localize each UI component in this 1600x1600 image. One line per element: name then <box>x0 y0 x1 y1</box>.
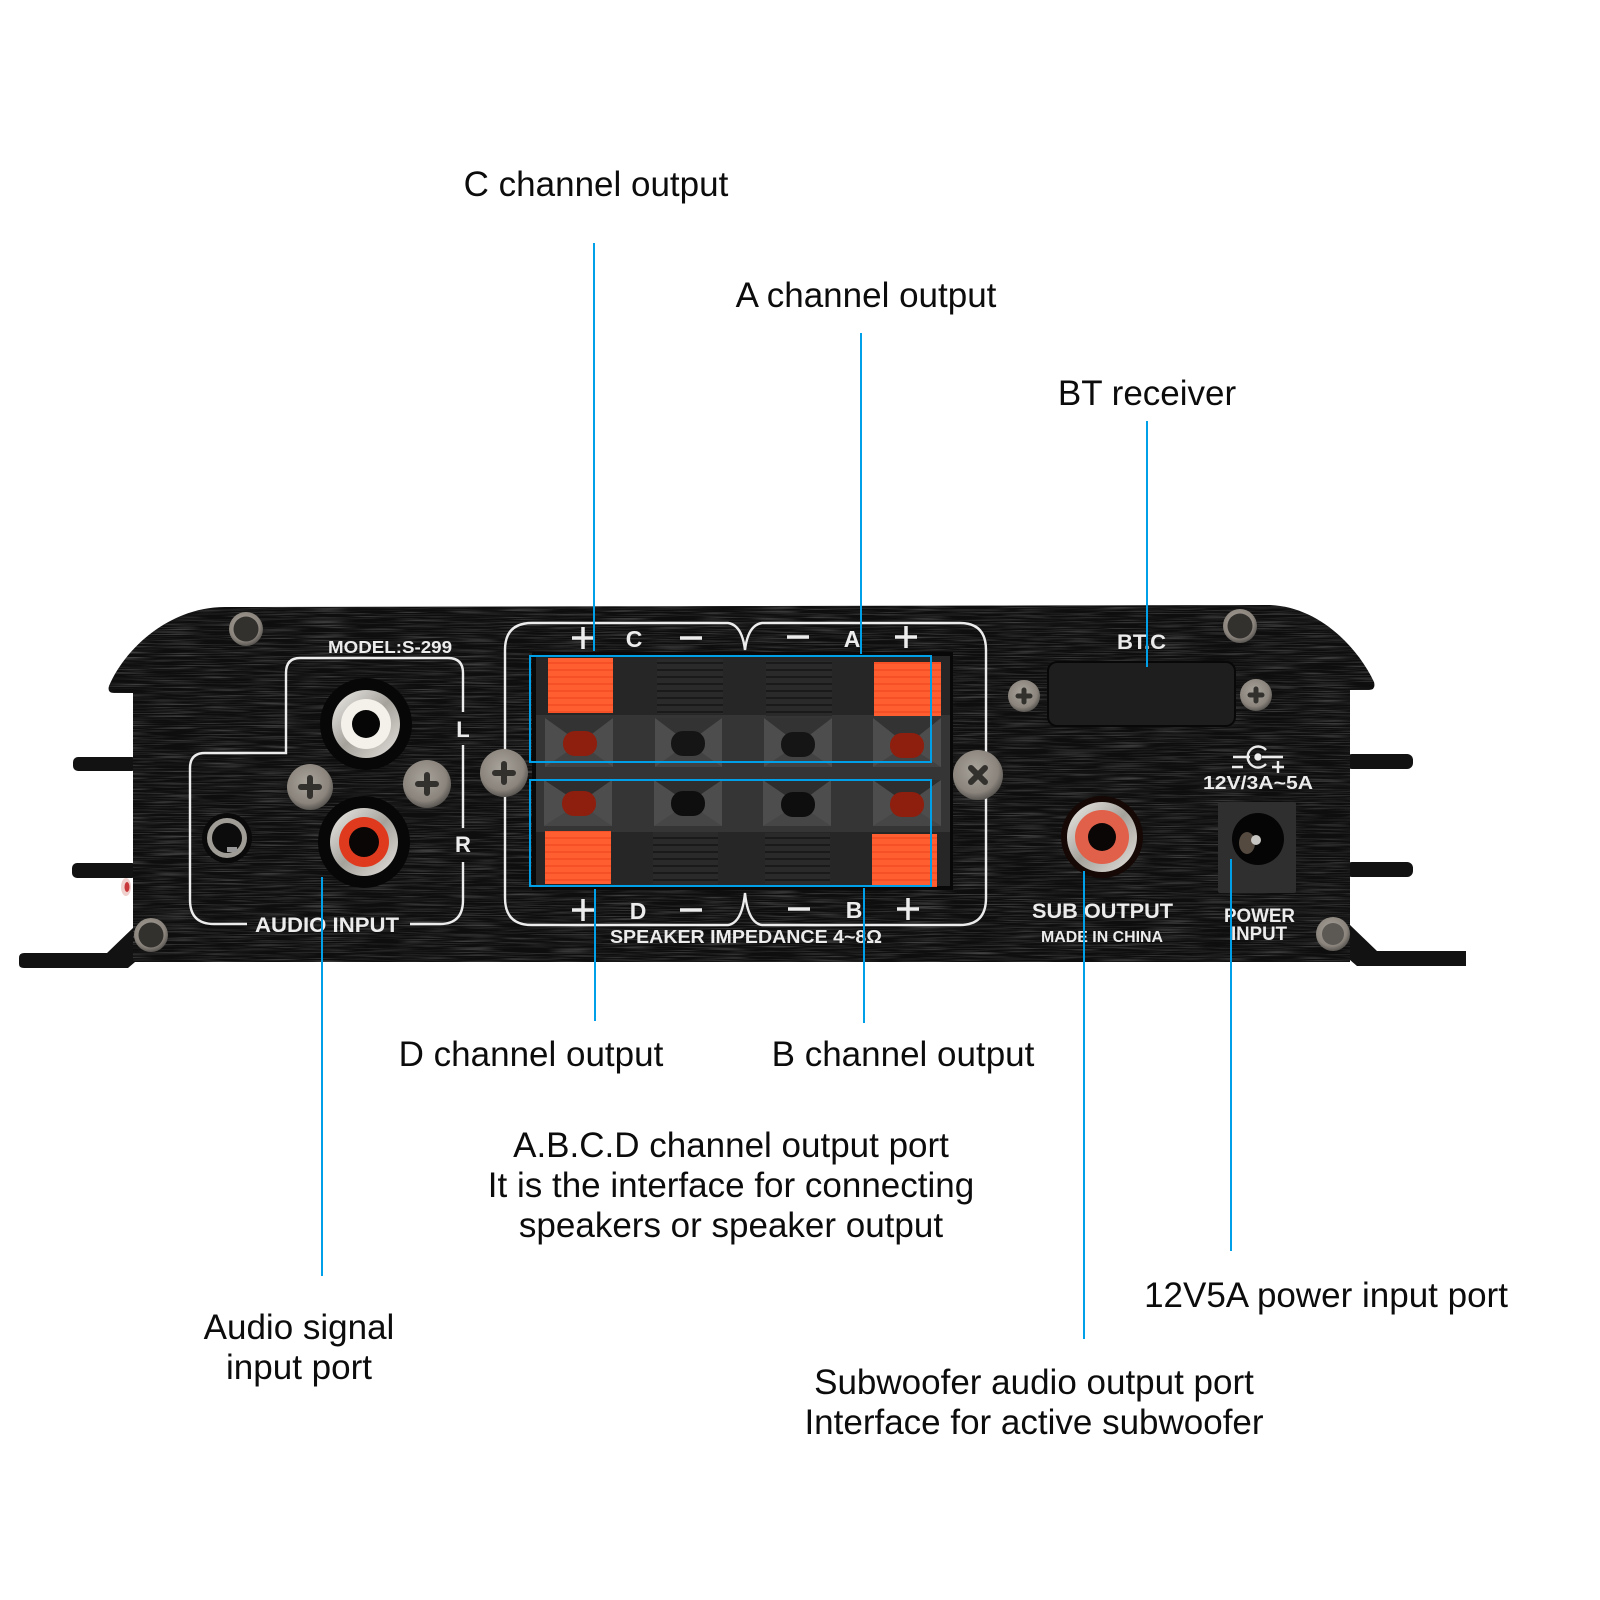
text block: subwoofer output description: Subwoofer audio output port <box>814 1363 1254 1402</box>
audio input outline <box>190 658 463 924</box>
left channel label: L <box>456 717 470 742</box>
text block: audio signal input port: input port <box>226 1348 372 1387</box>
BT label: BT.C <box>1117 631 1166 654</box>
speaker impedance label: SPEAKER IMPEDANCE 4~8Ω <box>610 926 882 947</box>
sub output label: SUB OUTPUT <box>1032 900 1173 923</box>
leader line: audio input <box>321 877 323 1276</box>
top polarity labels: C <box>626 626 642 652</box>
BT left screw <box>1008 680 1040 712</box>
label: C channel output: C channel output <box>464 165 729 204</box>
socket A minus <box>764 718 832 767</box>
panel: power input <box>1203 747 1313 945</box>
sub RCA jack <box>1061 796 1143 878</box>
DC barrel jack <box>1218 802 1296 893</box>
amplifier chassis <box>19 600 1466 970</box>
text block: audio signal input port: Audio signal <box>204 1308 394 1347</box>
leader line: BT receiver <box>1146 421 1148 667</box>
leader line: C channel <box>593 243 595 651</box>
middle band <box>536 715 950 832</box>
panel: sub output <box>1032 796 1173 946</box>
recess <box>532 652 953 890</box>
label: A channel output: A channel output <box>736 276 997 315</box>
orange latch C plus <box>548 658 613 713</box>
black latch B minus <box>765 833 830 884</box>
voltage label: 12V/3A~5A <box>1203 773 1313 793</box>
label: BT receiver: BT receiver <box>1058 374 1236 413</box>
terminal block <box>536 656 950 886</box>
R RCA jack <box>318 796 410 888</box>
chassis face plate <box>109 605 1374 962</box>
socket B minus <box>763 780 831 826</box>
leader line: subwoofer output <box>1083 871 1085 1339</box>
left heat-sink fins and foot <box>19 757 137 968</box>
black latch D minus <box>653 832 718 884</box>
amplifier port diagram <box>19 170 1508 1434</box>
socket C plus <box>545 718 613 767</box>
text block: channel output description: speakers or speaker output <box>519 1206 943 1245</box>
corner screw bottom left <box>134 918 168 952</box>
orange latch A plus <box>874 662 941 716</box>
top polarity labels <box>572 626 917 652</box>
made in china label: MADE IN CHINA <box>1041 929 1163 946</box>
orange latch D plus <box>545 831 611 884</box>
text block: channel output description: It is the interface for connecting <box>488 1166 974 1205</box>
corner screw top left <box>229 612 263 646</box>
panel: audio input <box>190 637 471 937</box>
leader line: B channel <box>863 888 865 1023</box>
socket A plus <box>873 718 941 767</box>
model label: MODEL:S-299 <box>328 637 452 657</box>
panel: speaker terminals <box>480 623 1003 947</box>
black latch C minus <box>657 659 723 714</box>
terminal block right screw <box>953 750 1003 800</box>
right panel screw <box>403 760 451 808</box>
right channel label: R <box>455 832 471 857</box>
bottom polarity labels: D <box>630 898 646 924</box>
input label: INPUT <box>1231 924 1287 945</box>
audio input label: AUDIO INPUT <box>255 914 399 937</box>
leader line: power input <box>1230 859 1232 1251</box>
BT window <box>1048 662 1235 726</box>
socket D plus <box>544 780 612 826</box>
DC polarity symbol <box>1232 747 1284 773</box>
panel: BT receiver window <box>1008 631 1272 726</box>
left panel screw <box>287 764 333 810</box>
orange latch B plus <box>872 834 937 887</box>
socket D minus <box>654 780 722 826</box>
power input label: POWER <box>1224 906 1295 927</box>
top polarity labels: A <box>844 626 860 652</box>
text block: channel output description: A.B.C.D channel output port <box>513 1126 949 1165</box>
highlight box: channels C and A <box>530 656 931 762</box>
socket C minus <box>655 718 722 767</box>
socket B plus <box>873 780 941 826</box>
corner screw top right <box>1223 609 1257 643</box>
label: D channel output: D channel output <box>399 1035 664 1074</box>
speaker panel outline <box>505 623 986 925</box>
bottom polarity labels: B <box>846 897 862 923</box>
corner screw bottom right <box>1316 917 1350 951</box>
brushed metal texture <box>100 600 1390 970</box>
right heat-sink fins and foot <box>1346 754 1466 966</box>
black latch A minus <box>766 661 832 716</box>
label: power input port: 12V5A power input port <box>1144 1276 1508 1315</box>
terminal block left screw <box>480 749 528 797</box>
label: B channel output: B channel output <box>772 1035 1035 1074</box>
L RCA jack <box>320 678 412 770</box>
highlight box: channels D and B <box>530 780 931 886</box>
3.5mm aux jack <box>202 813 252 863</box>
text block: subwoofer output description: Interface for active subwoofer <box>804 1403 1264 1442</box>
sticker remnant <box>121 878 131 896</box>
BT right screw <box>1240 679 1272 711</box>
leader line: A channel <box>860 333 862 654</box>
bottom polarity labels <box>572 897 919 924</box>
leader line: D channel <box>594 889 596 1021</box>
